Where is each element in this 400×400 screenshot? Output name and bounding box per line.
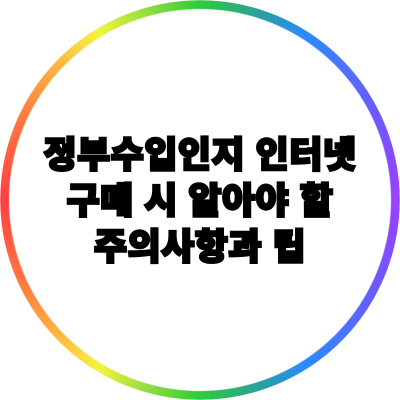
- title: 주의사항과 팁: [94, 226, 306, 267]
- title: [42, 134, 357, 267]
- title: 구매 시 알아야 할: [67, 180, 333, 221]
- title: 정부수입인지 인터넷: [43, 134, 357, 175]
